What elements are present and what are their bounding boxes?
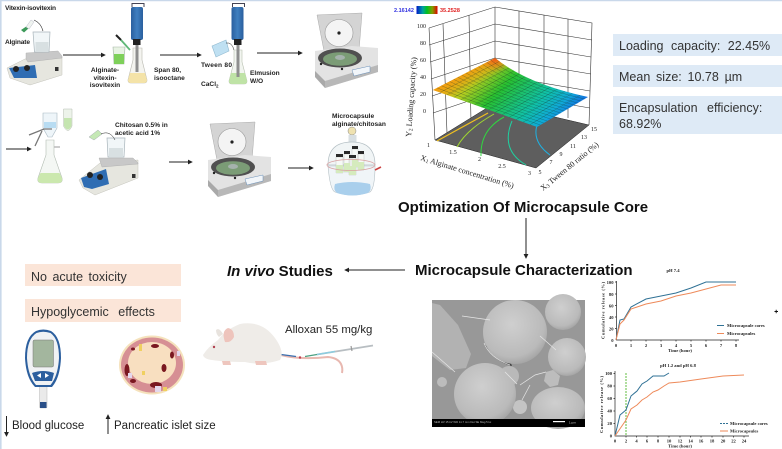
label: emulsion W/O: W/O — [250, 78, 263, 85]
icon: stir plate with chitosan beaker — [79, 130, 138, 195]
x tick labels: 24 — [742, 438, 747, 444]
y tick labels: 40 — [607, 408, 613, 414]
panel: in vivo outcomes — [6, 264, 373, 436]
y tick labels: 40 — [609, 315, 614, 320]
x3 axis label: X — [539, 182, 549, 193]
marker: small plus — [774, 310, 778, 313]
panel: optimization results — [613, 34, 782, 134]
x tick labels: 4 — [635, 438, 638, 444]
colour scale legend — [394, 6, 460, 14]
result: encapsulation efficiency — [613, 96, 782, 134]
x3 axis label: 3 — [546, 183, 552, 190]
y axis label: 2 — [408, 128, 415, 131]
axis titles: Time (hour) — [668, 348, 692, 353]
arrow: optimization to characterization — [525, 218, 527, 258]
legend: Microcapsule cores — [730, 421, 768, 426]
y tick labels: 0 — [611, 338, 614, 343]
legend — [717, 323, 765, 336]
x tick labels: 6 — [705, 343, 708, 348]
x tick labels: 18 — [710, 438, 715, 444]
x3 axis ticks: 13 — [581, 135, 587, 141]
heading: microcapsule characterization: Microcapsule Characterization — [415, 262, 633, 279]
axis titles: Cumulative release (%) — [600, 282, 606, 339]
legend — [720, 421, 768, 434]
arrow: blood glucose decreases — [6, 416, 8, 436]
x tick labels: 8 — [735, 343, 738, 348]
x1 axis label: 1 — [425, 159, 429, 165]
x1 axis label: Alginate concentration (%) — [428, 156, 515, 190]
icon: centrifuge — [315, 13, 378, 88]
y axis label: Y — [404, 131, 413, 137]
panel: response surface plot — [394, 6, 601, 193]
icon: green test tube — [64, 109, 72, 130]
arrow — [288, 167, 313, 169]
label: alginate-vitexin-isovitexin: vitexin- — [93, 75, 117, 82]
arrow: characterization to in vivo — [345, 269, 405, 271]
chart: release at pH 7.4 — [600, 268, 765, 353]
y tick labels: 100 — [607, 280, 614, 285]
icon: pancreatic islet cross-section — [119, 336, 185, 394]
y tick labels: 20 — [607, 421, 613, 426]
legend: Microcapsules — [730, 428, 758, 434]
heading: in vivo studies: In vivo Studies — [227, 263, 333, 280]
label: microcapsule alginate/chitosan: Microcapsule — [332, 113, 374, 120]
label: vitexin-isovitexin: Vitexin-isovitexin — [5, 5, 56, 12]
y axis label: Loading capacity (%) — [405, 57, 419, 129]
label: span 80 isooctane: Span 80, — [154, 67, 181, 74]
legend: Microcapsules — [727, 331, 755, 336]
x tick labels: 8 — [657, 438, 660, 444]
outcome: hypoglycemic effects: Hypoglycemic effects — [31, 305, 155, 319]
arrow — [63, 54, 105, 56]
y tick labels: 60 — [607, 396, 613, 401]
result: mean size — [613, 65, 782, 87]
icon: mouse with syringe — [203, 323, 373, 373]
x3 axis ticks: 7 — [550, 160, 552, 166]
x tick labels: 0 — [614, 438, 617, 444]
y tick labels: 20 — [609, 326, 614, 332]
y tick labels: 60 — [609, 304, 614, 308]
x tick labels: 2 — [645, 343, 648, 348]
label: calcium chloride: 2 — [216, 84, 219, 88]
chart title: pH 7.4 — [666, 268, 680, 273]
axis titles — [599, 376, 692, 448]
label: chitosan in acetic acid: Chitosan 0.5% in — [115, 122, 168, 129]
x tick labels: 12 — [678, 438, 683, 444]
label: alginate: Alginate — [5, 39, 30, 46]
label: emulsion W/O: Elmusion — [250, 70, 280, 77]
label: calcium chloride: CaCl — [201, 81, 216, 88]
x3 axis ticks: 15 — [591, 127, 597, 133]
arrow: islet size increases — [107, 415, 109, 434]
label: tween 80: Tween 80 — [201, 62, 232, 69]
arrow — [257, 52, 302, 54]
series: microcapsules — [615, 375, 744, 436]
label: chitosan in acetic acid: acetic acid 1% — [115, 130, 160, 137]
x3 axis ticks: 9 — [560, 152, 562, 158]
series: microcapsules — [616, 285, 736, 340]
label: span 80 isooctane: isooctane — [154, 75, 185, 82]
y tick labels: 80 — [607, 384, 613, 388]
x3 axis ticks: 5 — [538, 170, 542, 176]
label: alginate-vitexin-isovitexin: Alginate- — [91, 67, 119, 74]
axis titles: Time (hour) — [668, 444, 692, 448]
icon: stir plate with beaker — [7, 20, 62, 85]
response surface — [433, 58, 588, 127]
x tick labels: 14 — [688, 438, 694, 444]
outcome: no acute toxicity: No acute toxicity — [31, 270, 127, 284]
x tick labels: 2 — [625, 438, 628, 444]
icon: glucose meter — [25, 330, 61, 408]
icon: homogenizer with green flask and pouring beaker — [212, 4, 247, 84]
x1 axis ticks: 3 — [528, 171, 531, 177]
colour scale legend: 35.2528 — [440, 8, 460, 14]
label: blood glucose: Blood glucose — [12, 420, 84, 432]
y tick labels: 100 — [605, 371, 613, 376]
icon: dropper and green beaker — [113, 35, 130, 64]
x1 axis ticks: 1.5 — [449, 150, 457, 156]
x1 axis label: X — [419, 153, 428, 164]
x3 axis ticks: 11 — [570, 144, 576, 150]
panel: SEM micrograph — [432, 294, 586, 429]
outcome: no acute toxicity — [25, 264, 181, 286]
x tick labels: 1 — [630, 343, 633, 348]
y axis ticks: 40 — [420, 75, 426, 81]
y axis ticks: 60 — [420, 58, 426, 64]
axis titles — [600, 282, 692, 353]
y axis ticks: 100 — [417, 24, 426, 30]
x tick labels: 0 — [615, 343, 618, 348]
x tick labels: 10 — [667, 438, 672, 444]
result: loading capacity — [613, 34, 782, 56]
x3 axis label: Tween 80 ratio (%) — [545, 140, 601, 187]
outcome: hypoglycemic effects — [25, 299, 181, 322]
plot floor with contour lines — [435, 103, 589, 168]
result: mean size: Mean size: 10.78 µm — [619, 70, 742, 84]
result: encapsulation efficiency: Encapsulation efficiency: — [619, 101, 762, 115]
arrow — [6, 148, 31, 150]
series: microcapsule cores — [615, 373, 669, 436]
x tick labels: 16 — [699, 438, 704, 444]
y axis ticks: 0 — [423, 109, 426, 115]
heading: optimization of microcapsule core: Optimization Of Microcapsule Core — [398, 199, 648, 216]
chart title: pH 1.2 and pH 6.8 — [660, 363, 697, 368]
series: microcapsule cores — [616, 282, 736, 340]
axes — [615, 281, 739, 342]
result: loading capacity: Loading capacity: 22.45% — [619, 39, 770, 53]
SEM scale bar: SEM HV 15 kV WD 11.7 mm Det SE Mag 5 kx — [434, 420, 492, 424]
x1 axis ticks: 2 — [478, 157, 481, 163]
x tick labels: 6 — [646, 438, 649, 444]
x tick labels: 20 — [721, 438, 726, 444]
axis titles: Cumulative release (%) — [599, 376, 604, 433]
result: encapsulation efficiency: 68.92% — [619, 117, 661, 131]
label: alloxan dose: Alloxan 55 mg/kg — [285, 324, 372, 336]
axes — [614, 371, 749, 438]
plot box walls and grid — [429, 7, 592, 140]
panel: preparation workflow — [5, 4, 386, 197]
y axis ticks: 80 — [420, 41, 426, 47]
icon: vacuum filtration flask — [29, 113, 62, 183]
label: pancreatic islet size: Pancreatic islet size — [114, 420, 216, 432]
x1 axis ticks: 2.5 — [498, 164, 506, 170]
arrow — [160, 54, 201, 56]
legend: Microcapsule cores — [727, 323, 765, 328]
SEM scale bar — [434, 420, 576, 424]
label: microcapsule alginate/chitosan: alginate/chitosan — [332, 121, 386, 128]
x tick labels: 22 — [731, 438, 736, 444]
icon: centrifuge second — [208, 122, 271, 197]
label: alginate-vitexin-isovitexin: isovitexin — [90, 82, 120, 89]
y tick labels: 80 — [609, 292, 614, 297]
x tick labels: 3 — [660, 343, 663, 348]
x tick labels: 5 — [690, 343, 693, 348]
arrow — [169, 161, 192, 163]
x tick labels: 4 — [675, 343, 678, 348]
icon: homogenizer with yellow flask — [128, 4, 147, 83]
SEM scale bar: 1 µm — [569, 420, 576, 424]
x tick labels: 7 — [720, 343, 723, 348]
y tick labels: 0 — [610, 434, 613, 438]
x1 axis ticks: 1 — [427, 143, 430, 149]
gastric phase marker line — [625, 373, 627, 436]
chart: release at pH 1.2 and pH 6.8 — [599, 363, 768, 448]
y axis ticks: 20 — [420, 92, 426, 98]
colour scale legend: 2.16142 — [394, 8, 414, 14]
icon: desiccator with vials — [327, 127, 381, 196]
